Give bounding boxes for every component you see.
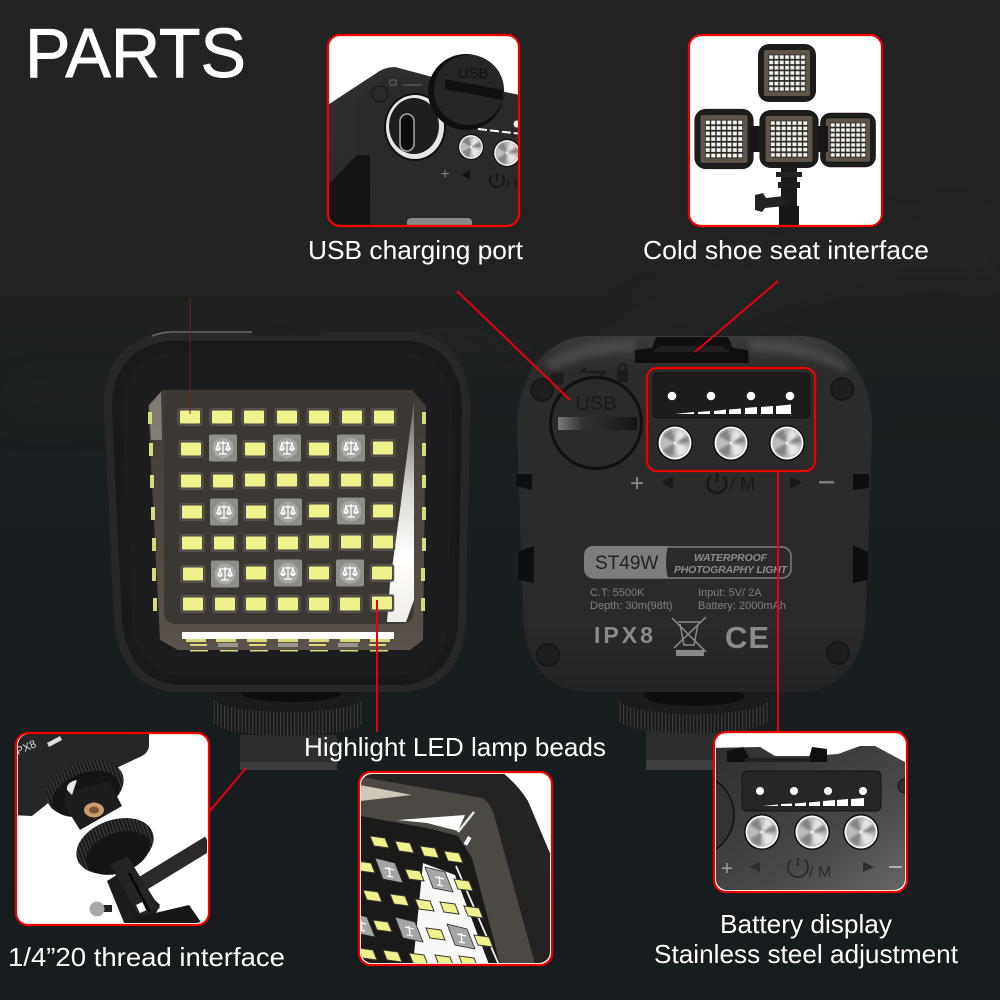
front mount knob and shoe — [212, 682, 364, 770]
label: battery display: Battery display — [720, 909, 892, 939]
front top highlight — [152, 332, 252, 336]
pole arm — [132, 843, 209, 890]
lens reflection — [387, 400, 414, 622]
close-up display — [742, 771, 881, 811]
side clips — [516, 474, 869, 583]
four mounted lights — [694, 44, 876, 169]
panel: cold shoe seat interface — [689, 35, 882, 236]
back mount knob and shoe — [618, 682, 770, 770]
light back view — [516, 336, 872, 770]
tripod pole — [755, 168, 802, 225]
close-up buttons — [744, 814, 879, 850]
model badge — [584, 546, 791, 578]
lock icons — [552, 364, 627, 383]
USB-C port — [384, 93, 446, 161]
specifications: C.T: 5500K — [590, 587, 645, 599]
USB cap — [549, 376, 643, 470]
LED beads — [178, 408, 396, 612]
upper knob and shoe — [46, 760, 124, 830]
specifications — [590, 587, 786, 612]
thread panel body — [18, 734, 149, 816]
USB lock mark — [390, 80, 422, 85]
USB cap open — [428, 54, 504, 130]
close-up USB cap edge — [716, 780, 735, 850]
battery display — [653, 373, 810, 418]
button labels — [630, 470, 834, 497]
LED board close-up — [361, 816, 500, 963]
close-up housing — [361, 774, 550, 963]
label: cold shoe seat interface: Cold shoe seat interface — [643, 235, 929, 265]
cold shoe — [635, 337, 749, 363]
lens surround — [148, 390, 426, 650]
title: PARTS — [25, 14, 246, 92]
specifications: Depth: 30m(98ft) — [590, 600, 673, 612]
model badge: PHOTOGRAPHY LIGHT — [674, 564, 789, 576]
specifications: Input: 5V/ 2A — [698, 587, 762, 599]
label: thread interface: 1/4”20 thread interface — [8, 942, 285, 972]
close-up cold shoe — [727, 747, 827, 762]
USB panel buttons and labels: / M — [506, 176, 524, 191]
steel buttons — [657, 425, 805, 461]
front bezel — [112, 341, 462, 685]
certification marks: IPX8 — [594, 622, 656, 648]
label: USB charging port: USB charging port — [308, 235, 524, 265]
front body — [104, 332, 470, 692]
panel: thread interface — [10, 725, 209, 928]
certification marks: CE — [725, 620, 769, 655]
close-up labels — [722, 858, 902, 878]
back body — [517, 336, 872, 692]
red leader lines — [190, 281, 778, 812]
thread panel body: PX8 — [14, 738, 38, 758]
USB body — [329, 67, 518, 225]
back top highlights — [545, 340, 850, 372]
light front view — [104, 332, 470, 770]
USB panel buttons and labels — [407, 120, 524, 230]
model badge: ST49W — [595, 553, 658, 574]
screw holes — [531, 378, 853, 666]
close-up beads — [361, 836, 494, 963]
lower knob and mount — [76, 818, 201, 923]
label: battery display: Stainless steel adjustment — [654, 939, 959, 969]
red highlight box: controls — [647, 368, 815, 471]
close-up labels: + — [721, 858, 733, 880]
bottom lit strip — [182, 632, 394, 652]
USB panel buttons and labels: + — [440, 166, 450, 183]
certification marks — [594, 617, 769, 656]
close-up body — [716, 746, 905, 890]
USB cap open: USB — [458, 65, 488, 82]
panel: battery display close-up — [712, 730, 908, 894]
panel: LED close-up — [358, 770, 554, 966]
specifications: Battery: 2000mAh — [698, 600, 786, 612]
button labels: + — [630, 470, 644, 497]
label: highlight LED lamp beads: Highlight LED lamp beads — [304, 732, 606, 762]
label: battery display — [654, 909, 959, 969]
button labels: / M — [730, 474, 755, 494]
panel: USB charging port — [326, 34, 520, 228]
side LED reflections — [148, 412, 426, 611]
close-up labels: / M — [809, 864, 831, 881]
model badge: WATERPROOF — [694, 552, 768, 564]
USB cap: USB — [575, 393, 617, 415]
LED board — [164, 390, 414, 624]
